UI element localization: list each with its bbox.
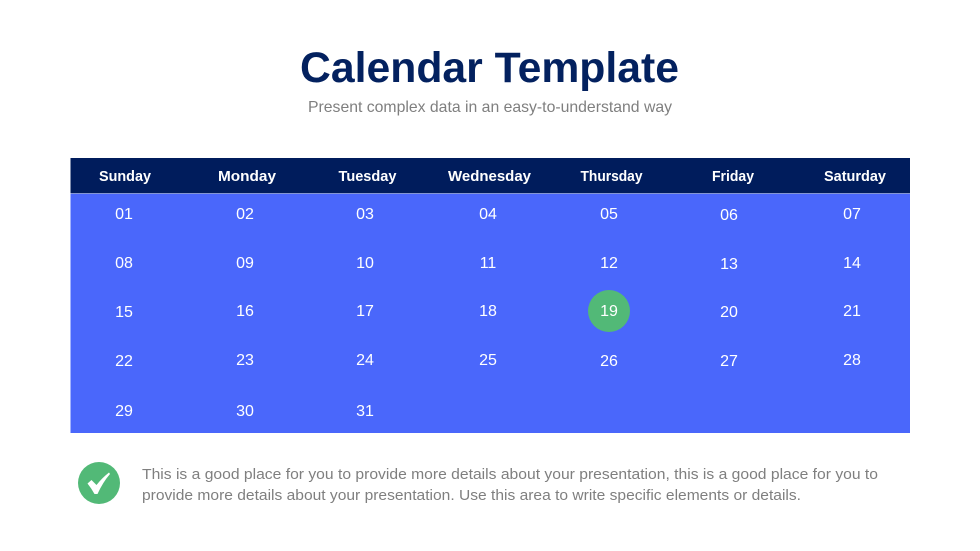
week 2 dates: [115, 255, 861, 273]
week 1 dates: 06: [720, 207, 738, 224]
description text: This is a good place for you to provide more details about your presentation, this is a good place for you to: [142, 466, 878, 483]
week 3 dates: 18: [479, 303, 497, 320]
week 4 dates: 26: [600, 353, 618, 370]
week 2 dates: 14: [843, 255, 861, 272]
week 5 dates: [115, 403, 374, 420]
week 1 dates: [115, 206, 861, 224]
week 1 dates: 02: [236, 206, 254, 223]
week 2 dates: 12: [600, 255, 618, 272]
highlight: day 19: [588, 290, 630, 332]
header row: Tuesday: [338, 168, 397, 185]
icon: check mark: [78, 462, 120, 504]
header row: Saturday: [824, 168, 887, 185]
week 3 dates: 17: [356, 303, 374, 320]
week 2 dates: 11: [480, 255, 496, 272]
week 5 dates: 30: [236, 403, 254, 420]
calendar body: [70, 193, 910, 433]
header row: Thursday: [580, 168, 643, 185]
week 4 dates: 24: [356, 352, 374, 369]
week 3 dates: 21: [843, 303, 861, 320]
week 5 dates: 31: [356, 403, 374, 420]
week 4 dates: [115, 352, 861, 370]
week 5 dates: 29: [115, 403, 133, 420]
description text: provide more details about your presentation. Use this area to write specific elements or details.: [142, 487, 801, 504]
week 1 dates: 05: [600, 206, 618, 223]
week 2 dates: 13: [720, 256, 738, 273]
week 2 dates: 08: [115, 255, 133, 272]
week 1 dates: 01: [115, 206, 133, 223]
header row: Wednesday: [448, 168, 532, 185]
header row: Friday: [712, 168, 755, 185]
header row: Monday: [218, 168, 277, 185]
week 3 dates: 20: [720, 304, 738, 321]
week 3 dates: 15: [115, 304, 133, 321]
subtitle: Present complex data in an easy-to-understand way: [308, 99, 672, 116]
week 1 dates: 07: [843, 206, 861, 223]
panel: calendar: [70, 158, 910, 433]
week 2 dates: 10: [356, 255, 374, 272]
week 4 dates: 22: [115, 353, 133, 370]
title: Calendar Template: [300, 44, 679, 92]
week 3 dates: [115, 303, 861, 321]
week 4 dates: 28: [843, 352, 861, 369]
week 1 dates: 03: [356, 206, 374, 223]
week 1 dates: 04: [479, 206, 497, 223]
week 2 dates: 09: [236, 255, 254, 272]
week 4 dates: 27: [720, 353, 738, 370]
week 3 dates: 16: [236, 303, 254, 320]
header row: Sunday: [99, 168, 152, 185]
week 3 dates: 19: [600, 303, 618, 320]
week 4 dates: 25: [479, 352, 497, 369]
description text: [142, 466, 878, 504]
week 4 dates: 23: [236, 352, 254, 369]
header row: [70, 158, 910, 194]
